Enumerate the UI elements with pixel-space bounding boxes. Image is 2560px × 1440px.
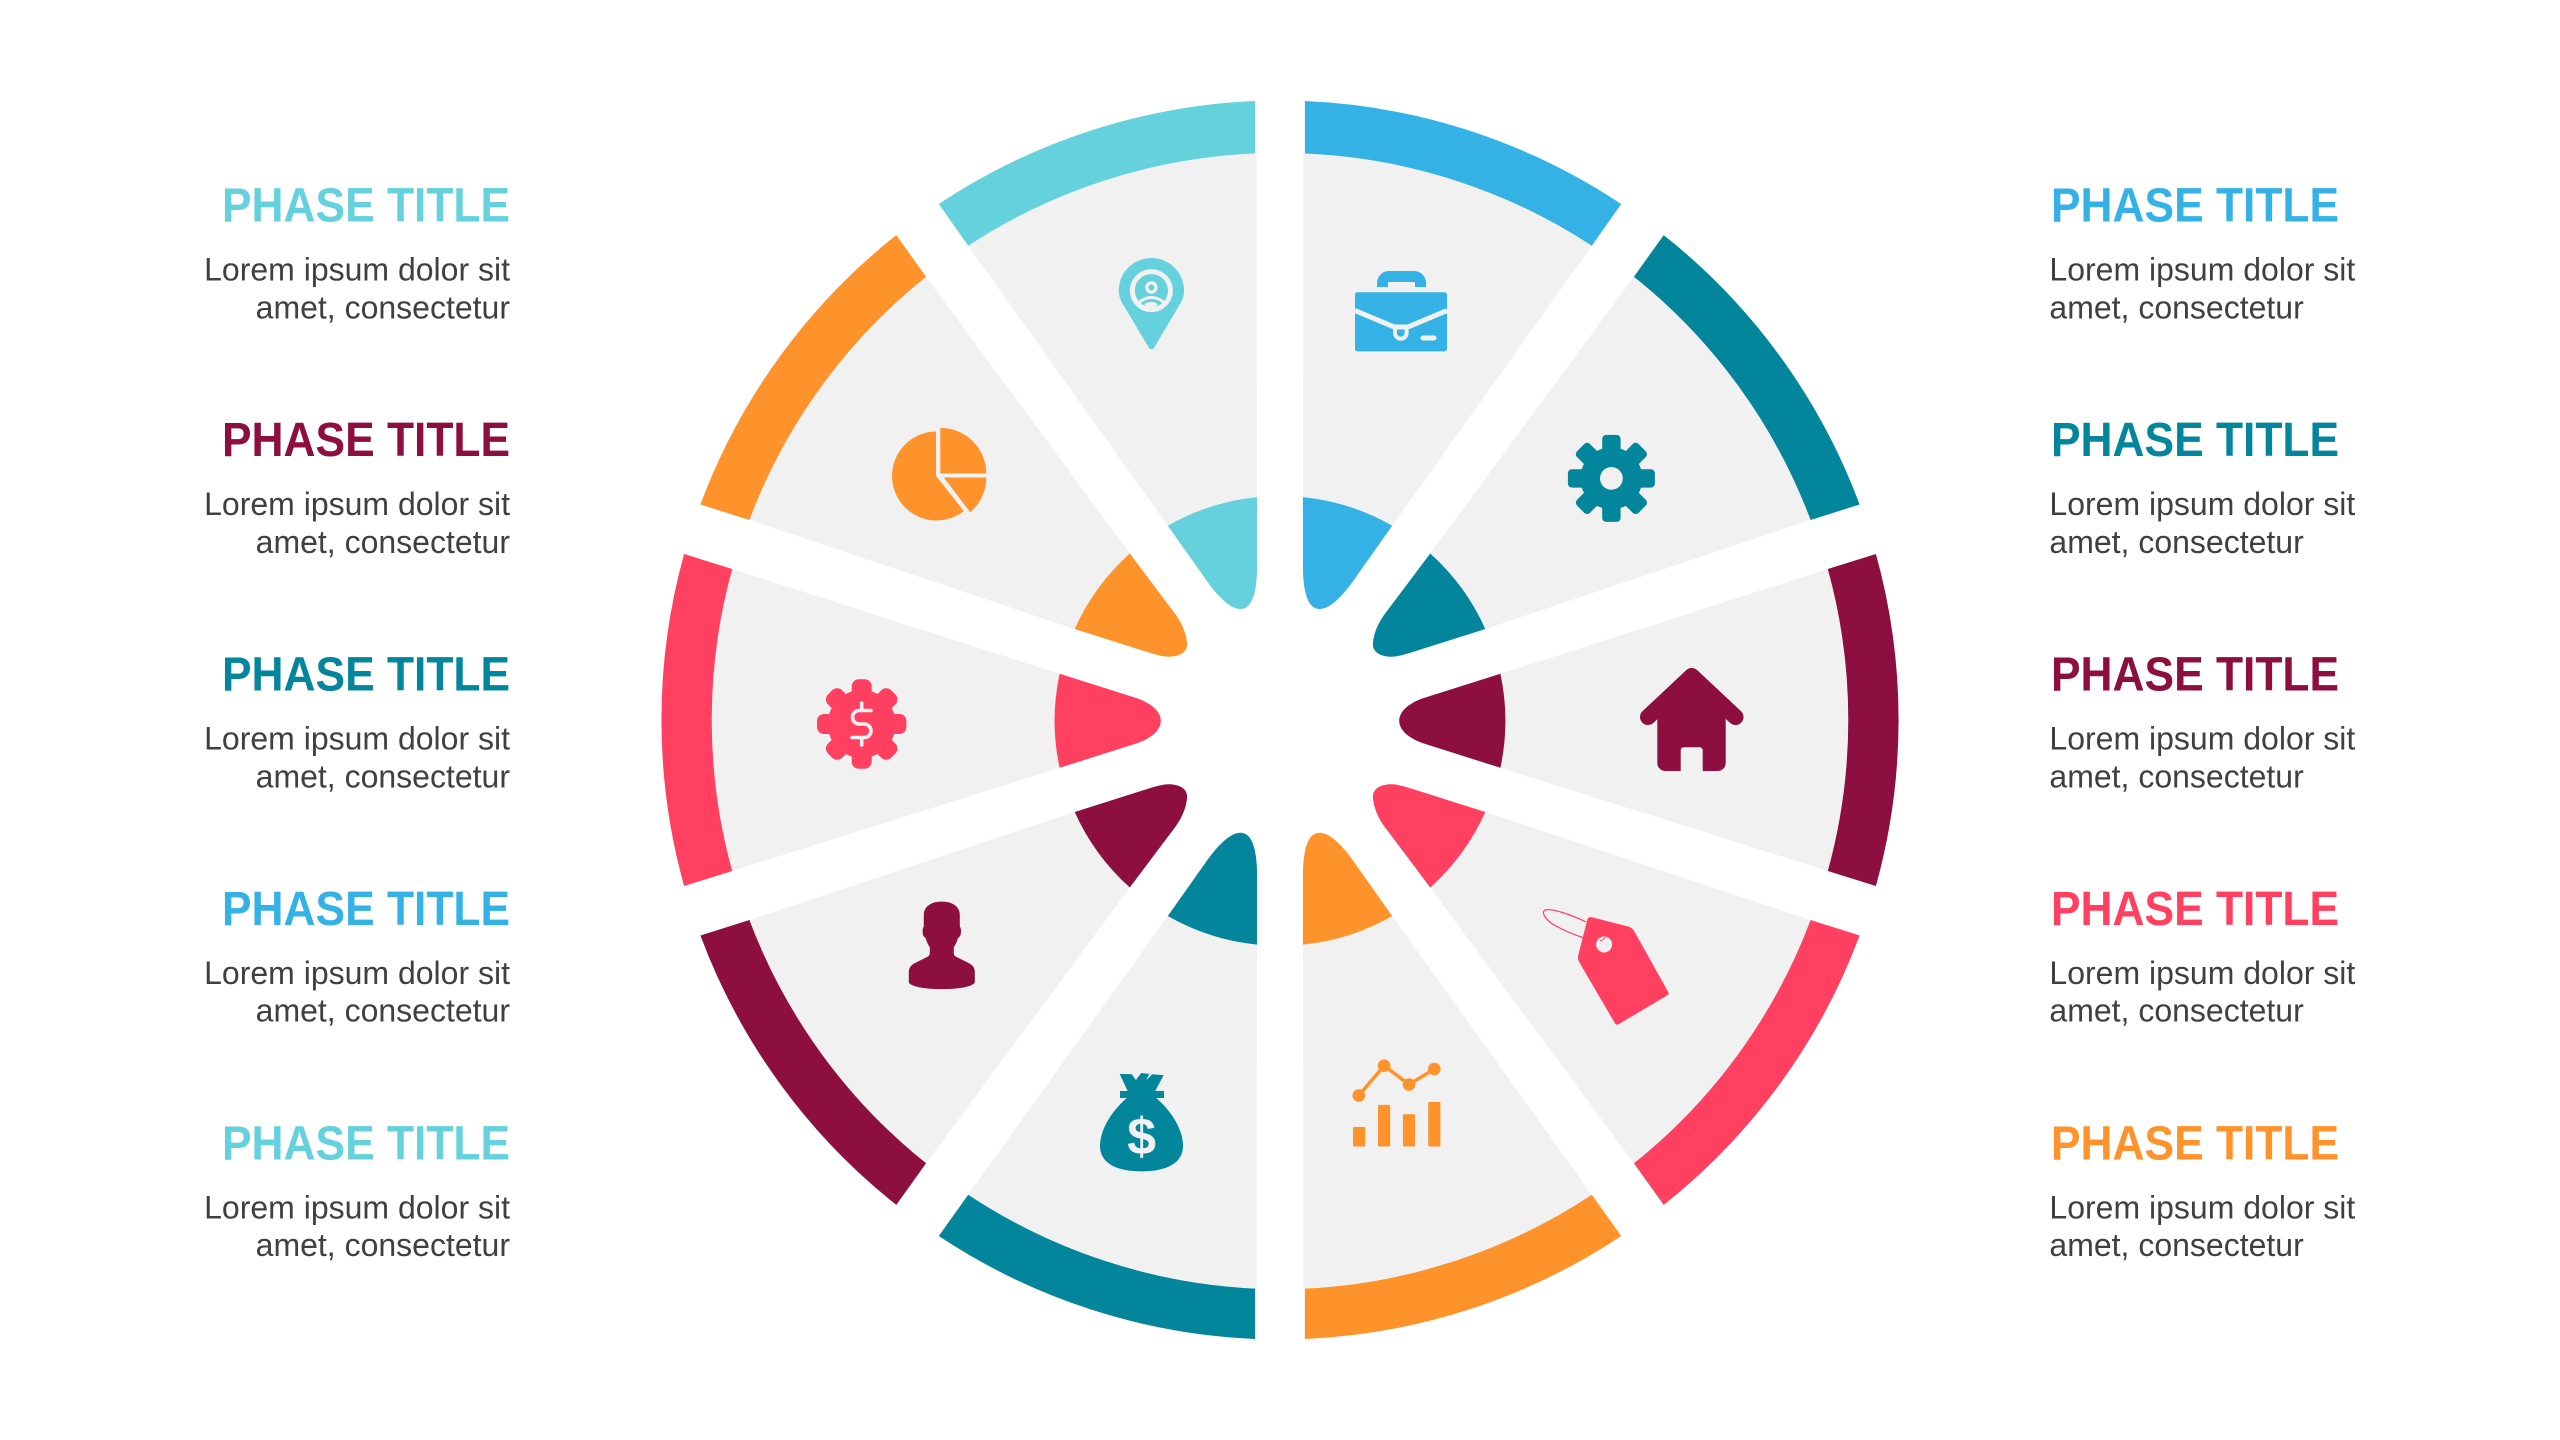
text block: left phase 2	[204, 414, 510, 560]
segment: orange upper left	[700, 235, 1187, 657]
text block: right phase 5: PHASE TITLE	[2051, 1118, 2339, 1171]
icon: line and bar chart	[1352, 1059, 1441, 1146]
text block: left phase 3: Lorem ipsum dolor sit	[204, 720, 510, 756]
text block: right phase 2	[2049, 414, 2355, 560]
text block: right phase 4: Lorem ipsum dolor sit	[2049, 955, 2355, 991]
icon: gear with dollar sign	[817, 679, 906, 769]
text block: right phase 4	[2049, 883, 2355, 1029]
text block: left phase 2: PHASE TITLE	[222, 414, 510, 467]
segment: teal upper right	[1373, 235, 1860, 657]
text block: left phase 3: amet, consectetur	[256, 758, 510, 794]
text block: left phase 4	[204, 883, 510, 1029]
icon: person bust	[909, 902, 975, 989]
text block: left phase 1: amet, consectetur	[256, 290, 510, 326]
text block: left phase 1: Lorem ipsum dolor sit	[204, 251, 510, 287]
text block: right phase 1: amet, consectetur	[2049, 290, 2304, 326]
text block: right phase 1	[2049, 180, 2355, 326]
text block: right phase 5: amet, consectetur	[2049, 1227, 2304, 1263]
icon: briefcase	[1355, 271, 1447, 351]
text block: right phase 2: amet, consectetur	[2049, 524, 2304, 560]
text block: right phase 2: Lorem ipsum dolor sit	[2049, 486, 2355, 522]
text block: right phase 3	[2049, 649, 2355, 794]
text block: right phase 5	[2049, 1118, 2355, 1263]
text block: right phase 5: Lorem ipsum dolor sit	[2049, 1189, 2355, 1225]
icon: settings gear	[1568, 435, 1655, 522]
text block: right phase 1: PHASE TITLE	[2051, 180, 2339, 232]
icon: house	[1648, 676, 1736, 771]
icon: location pin with person	[1119, 258, 1184, 349]
icon: pie chart	[893, 428, 986, 520]
segment: teal bottom left	[939, 833, 1257, 1339]
text block: right phase 3: amet, consectetur	[2049, 758, 2304, 794]
text block: left phase 3	[204, 649, 510, 794]
text block: left phase 5: PHASE TITLE	[222, 1118, 510, 1171]
text block: left phase 4: PHASE TITLE	[222, 883, 510, 936]
text block: right phase 2: PHASE TITLE	[2051, 414, 2339, 467]
text block: left phase 4: Lorem ipsum dolor sit	[204, 955, 510, 991]
segment: red left	[661, 554, 1161, 886]
wheel: ten-segment circular diagram	[661, 101, 1899, 1339]
segment: orange bottom right	[1303, 833, 1621, 1339]
text block: right phase 3: Lorem ipsum dolor sit	[2049, 720, 2355, 756]
text block: right phase 4: PHASE TITLE	[2051, 883, 2339, 936]
segment: maroon right	[1399, 554, 1899, 886]
text block: right phase 3: PHASE TITLE	[2051, 649, 2339, 702]
icon: money bag: $	[1127, 1108, 1156, 1166]
text block: left phase 1	[204, 180, 510, 326]
text block: left phase 5: Lorem ipsum dolor sit	[204, 1189, 510, 1225]
text block: left phase 2: Lorem ipsum dolor sit	[204, 486, 510, 522]
text block: left phase 2: amet, consectetur	[256, 524, 510, 560]
text block: left phase 1: PHASE TITLE	[222, 180, 510, 232]
icon: price tag	[1543, 910, 1669, 1025]
icon: money bag	[1100, 1073, 1183, 1171]
text block: left phase 5	[204, 1118, 510, 1263]
segment: maroon lower left	[700, 784, 1187, 1205]
segment: cyan top left	[939, 101, 1257, 609]
segment: red lower right	[1373, 784, 1860, 1205]
text block: right phase 4: amet, consectetur	[2049, 993, 2304, 1029]
segment: blue top right	[1303, 101, 1621, 609]
text block: left phase 3: PHASE TITLE	[222, 649, 510, 702]
text block: left phase 4: amet, consectetur	[256, 993, 510, 1029]
text block: right phase 1: Lorem ipsum dolor sit	[2049, 251, 2355, 287]
text block: left phase 5: amet, consectetur	[256, 1227, 510, 1263]
